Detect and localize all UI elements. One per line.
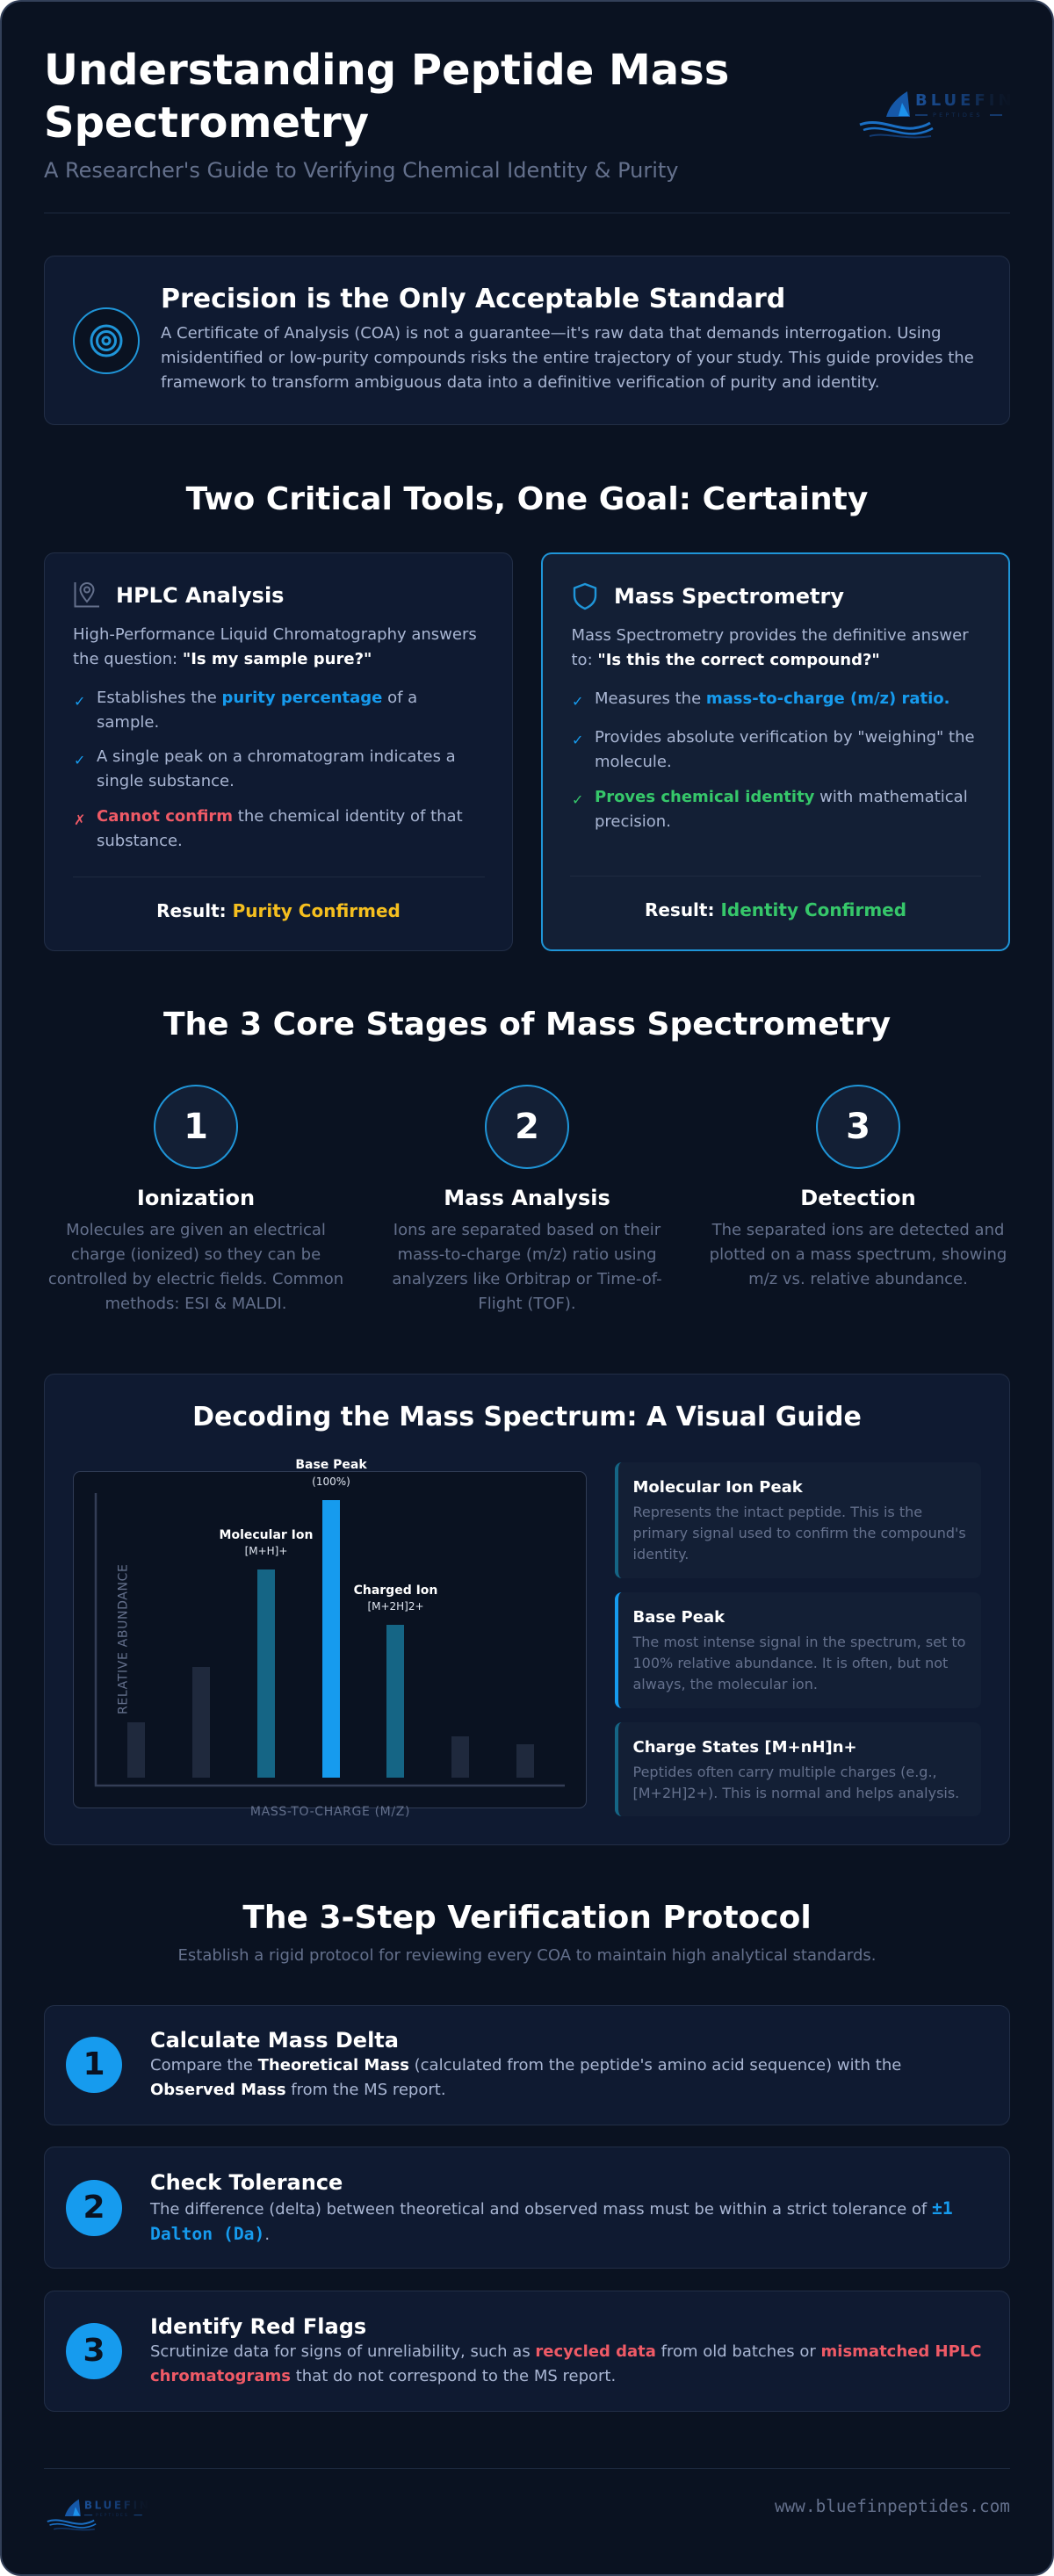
legend: molecular ion peak xyxy=(615,1462,981,1578)
step text: Dalton (Da). xyxy=(150,2224,270,2244)
card intro: the question: "Is my sample pure?" xyxy=(73,650,372,668)
stage description: mass-to-charge (m/z) ratio using xyxy=(397,1245,657,1264)
step text xyxy=(149,2198,953,2244)
stage description: analyzers like Orbitrap or Time-of- xyxy=(392,1270,662,1288)
stage 2: mass analysis xyxy=(392,1085,662,1313)
panel body text: A Certificate of Analysis (COA) is not a guarantee—it's raw data that demands interrogation. Using xyxy=(161,324,942,343)
stage description: methods: ESI & MALDI. xyxy=(105,1295,287,1313)
logo: Bluefin Peptides header xyxy=(859,91,1010,139)
card title: HPLC Analysis xyxy=(116,583,284,608)
stage 1: ionization xyxy=(48,1085,343,1313)
legend description xyxy=(632,1634,965,1692)
result: identity confirmed: Result: Identity Confirmed xyxy=(645,899,906,920)
list item: purity percentage: ✓ xyxy=(74,693,85,710)
stage description xyxy=(392,1221,662,1313)
list item: cannot confirm xyxy=(74,807,463,850)
stage title: Ionization xyxy=(137,1186,255,1210)
stage description: charge (ionized) so they can be xyxy=(71,1245,321,1264)
list item: cannot confirm: Cannot confirm the chemical identity of that xyxy=(97,807,463,826)
heading: 3 core stages: The 3 Core Stages of Mass Spectrometry xyxy=(163,1007,891,1043)
title xyxy=(44,46,729,148)
legend description: primary signal used to confirm the compound's xyxy=(632,1525,966,1541)
step number xyxy=(66,2323,122,2379)
protocol subtitle: Establish a rigid protocol for reviewing every COA to maintain high analytical standards. xyxy=(178,1946,876,1965)
step 2: check tolerance xyxy=(44,2147,1010,2269)
card intro xyxy=(571,626,969,669)
heading: verification protocol: The 3-Step Verification Protocol xyxy=(242,1899,812,1936)
legend description: identity. xyxy=(632,1546,689,1562)
logo: Bluefin Peptides footer xyxy=(47,2499,148,2531)
card intro: High-Performance Liquid Chromatography answers xyxy=(73,625,477,644)
stage description: Molecules are given an electrical xyxy=(66,1221,326,1239)
stage number xyxy=(485,1085,569,1169)
y axis label: RELATIVE ABUNDANCE xyxy=(116,1563,130,1714)
step title: Calculate Mass Delta xyxy=(150,2028,399,2053)
list item: purity percentage: Establishes the purity percentage of a xyxy=(97,689,417,707)
list item: mass-to-charge: ✓ xyxy=(572,693,583,710)
stage description: Ions are separated based on their xyxy=(393,1221,661,1239)
stage 3: detection xyxy=(710,1085,1007,1288)
footer url: www.bluefinpeptides.com xyxy=(775,2496,1010,2516)
stage number xyxy=(154,1085,238,1169)
logo: Bluefin Peptides header: PEPTIDES xyxy=(933,112,983,119)
list item: single peak: ✓ xyxy=(74,752,85,768)
legend title: Base Peak xyxy=(632,1608,725,1627)
stage description: Flight (TOF). xyxy=(478,1295,576,1313)
list item: single peak: A single peak on a chromatogram indicates a xyxy=(97,747,456,766)
step number: 3 xyxy=(83,2333,105,2369)
card title: Mass Spectrometry xyxy=(614,584,844,609)
panel body text xyxy=(161,324,974,392)
list item: proves identity: Proves chemical identity with mathematical xyxy=(595,788,968,806)
legend description: Represents the intact peptide. This is the xyxy=(632,1504,922,1519)
step number xyxy=(66,2180,122,2236)
step number xyxy=(66,2037,122,2093)
stage number: 3 xyxy=(846,1107,870,1147)
card intro: Mass Spectrometry provides the definitive answer xyxy=(571,626,969,645)
stage description xyxy=(710,1221,1007,1288)
step 1: calculate mass delta xyxy=(44,2005,1010,2125)
legend description xyxy=(632,1764,959,1800)
step number: 2 xyxy=(83,2190,105,2226)
legend description: Peptides often carry multiple charges (e.g., xyxy=(632,1764,937,1779)
logo: Bluefin Peptides footer: PEPTIDES xyxy=(96,2513,129,2518)
step 3: identify red flags xyxy=(44,2291,1010,2412)
peak label: charged ion: [M+2H]2+ xyxy=(367,1600,424,1613)
list item: single peak xyxy=(74,747,456,790)
panel heading: Decoding the Mass Spectrum: A Visual Guide xyxy=(192,1402,862,1432)
peak label: base peak xyxy=(295,1458,367,1488)
panel: mass spectrometry xyxy=(541,552,1010,951)
legend: charge states xyxy=(615,1722,981,1816)
peak label: charged ion: Charged Ion xyxy=(354,1584,437,1598)
peak label: base peak: Base Peak xyxy=(295,1458,367,1472)
step text xyxy=(150,2342,981,2385)
list item: absolute verification: ✓ xyxy=(572,732,583,748)
card intro: to: "Is this the correct compound?" xyxy=(571,651,880,669)
step number: 1 xyxy=(83,2046,105,2082)
result: purity confirmed: Result: Purity Confirmed xyxy=(156,900,401,921)
legend description: The most intense signal in the spectrum, set to xyxy=(632,1634,965,1649)
list item: absolute verification: Provides absolute verification by "weighing" the xyxy=(595,728,975,747)
list item: cannot confirm: ✗ xyxy=(74,812,85,828)
stage number xyxy=(816,1085,900,1169)
step text xyxy=(150,2056,901,2099)
peak bars xyxy=(127,1500,534,1778)
legend description: always, the molecular ion. xyxy=(632,1676,818,1692)
card intro xyxy=(73,625,477,668)
x axis label: MASS-TO-CHARGE (M/Z) xyxy=(250,1805,410,1819)
list item: proves identity xyxy=(572,788,968,831)
stage title: Mass Analysis xyxy=(444,1186,610,1210)
peak label: charged ion xyxy=(354,1584,437,1613)
step title: Identify Red Flags xyxy=(150,2314,366,2339)
list item: proves identity: precision. xyxy=(595,812,671,831)
chart: mass spectrum xyxy=(73,1458,587,1819)
peak label: molecular ion xyxy=(220,1528,313,1557)
step text: The difference (delta) between theoretical and observed mass must be within a strict tolerance of ±1 xyxy=(150,2198,953,2219)
heading: two critical tools: Two Critical Tools, One Goal: Certainty xyxy=(186,481,868,516)
stage number: 2 xyxy=(515,1107,539,1147)
stage description: controlled by electric fields. Common xyxy=(48,1270,343,1288)
stage description: The separated ions are detected and xyxy=(712,1221,1004,1239)
list item: cannot confirm: substance. xyxy=(97,832,183,850)
list item: absolute verification: molecule. xyxy=(595,753,672,771)
peak label: base peak: (100%) xyxy=(312,1476,350,1488)
panel body text: misidentified or low-purity compounds risks the entire trajectory of your study. This guide provides the xyxy=(161,349,974,367)
stage number: 1 xyxy=(184,1107,208,1147)
list item: purity percentage: sample. xyxy=(97,713,159,732)
list item: proves identity: ✓ xyxy=(572,791,583,808)
legend title: Charge States [M+nH]n+ xyxy=(632,1738,857,1757)
step text: Observed Mass from the MS report. xyxy=(150,2081,446,2099)
legend description: [M+2H]2+). This is normal and helps analysis. xyxy=(632,1785,959,1800)
step text: Compare the Theoretical Mass (calculated from the peptide's amino acid sequence) with the xyxy=(150,2056,901,2075)
title: Understanding Peptide Mass xyxy=(44,46,729,95)
stage title: Detection xyxy=(800,1186,916,1210)
icon: shield xyxy=(573,583,597,610)
peak label: molecular ion: [M+H]+ xyxy=(245,1545,287,1557)
panel heading: Precision is the Only Acceptable Standard xyxy=(161,284,785,314)
list item: mass-to-charge: Measures the mass-to-charge (m/z) ratio. xyxy=(595,689,950,708)
panel: decoding the mass spectrum xyxy=(44,1374,1010,1845)
legend title: Molecular Ion Peak xyxy=(632,1478,803,1497)
legend description xyxy=(632,1504,966,1562)
list item: single peak: single substance. xyxy=(97,772,235,790)
panel: HPLC analysis xyxy=(44,552,513,951)
stage description: m/z vs. relative abundance. xyxy=(748,1270,968,1288)
list item: purity percentage xyxy=(74,689,417,732)
panel: precision intro xyxy=(44,256,1010,425)
stage description: plotted on a mass spectrum, showing xyxy=(710,1245,1007,1264)
stage description xyxy=(48,1221,343,1313)
subtitle: A Researcher's Guide to Verifying Chemical Identity & Purity xyxy=(44,158,678,183)
list item: absolute verification xyxy=(572,728,975,771)
legend description: 100% relative abundance. It is often, but not xyxy=(632,1655,948,1670)
legend: base peak xyxy=(615,1592,981,1708)
panel body text: framework to transform ambiguous data into a definitive verification of purity and identity. xyxy=(161,373,879,392)
step text: Scrutinize data for signs of unreliability, such as recycled data from old batches or mismatched HPLC xyxy=(150,2342,981,2361)
peak label: molecular ion: Molecular Ion xyxy=(220,1528,313,1542)
icon: target xyxy=(73,307,140,374)
step title: Check Tolerance xyxy=(150,2170,343,2195)
icon: HPLC map pin xyxy=(74,582,99,608)
title: Spectrometry xyxy=(44,98,369,148)
step text: chromatograms that do not correspond to the MS report. xyxy=(150,2367,616,2385)
